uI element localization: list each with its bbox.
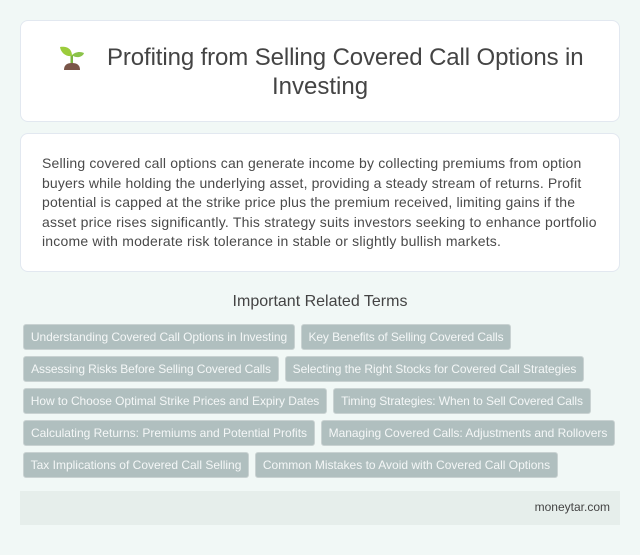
- chip: [23, 356, 279, 382]
- chip: [333, 388, 591, 414]
- chip: [255, 452, 558, 478]
- chip: [23, 324, 295, 350]
- chip: Key Benefits of Selling Covered Calls: [308, 330, 504, 344]
- chip: Common Mistakes to Avoid with Covered Call Options: [263, 458, 550, 472]
- chip: Selecting the Right Stocks for Covered Call Strategies: [293, 362, 576, 376]
- chip: [23, 452, 249, 478]
- panel: description card: [20, 133, 620, 272]
- chip: [321, 420, 615, 446]
- description text: buyers while holding the underlying asset, providing a steady stream of returns. Profit: [42, 174, 581, 190]
- title: Investing: [272, 73, 368, 100]
- description text: asset price rises significantly. This strategy suits investors seeking to enhance portfolio: [42, 214, 597, 230]
- description text: potential is capped at the strike price plus the premium received, limiting gains if the: [42, 194, 575, 210]
- chip: How to Choose Optimal Strike Prices and Expiry Dates: [31, 394, 319, 408]
- icon: seedling: [60, 46, 84, 70]
- chip: [23, 420, 315, 446]
- title: [107, 44, 584, 100]
- chip: Timing Strategies: When to Sell Covered Calls: [341, 394, 583, 408]
- heading: related terms: Important Related Terms: [233, 293, 407, 310]
- panel: title card: [20, 20, 620, 122]
- chip: Calculating Returns: Premiums and Potential Profits: [31, 426, 307, 440]
- chip: [23, 388, 327, 414]
- chip: Understanding Covered Call Options in Investing: [31, 330, 287, 344]
- chip: Tax Implications of Covered Call Selling: [31, 458, 241, 472]
- description text: income with moderate risk tolerance in stable or slightly bullish markets.: [42, 233, 501, 249]
- chip: Assessing Risks Before Selling Covered Calls: [31, 362, 271, 376]
- footer source: moneytar.com: [535, 500, 610, 514]
- title: Profiting from Selling Covered Call Options in: [107, 44, 584, 71]
- description text: Selling covered call options can generate income by collecting premiums from option: [42, 155, 581, 171]
- chip: Managing Covered Calls: Adjustments and Rollovers: [329, 426, 607, 440]
- description text: [42, 155, 597, 249]
- chip: [301, 324, 511, 350]
- footer bar: [20, 491, 620, 525]
- chip: [285, 356, 584, 382]
- chip list: related terms: [23, 324, 615, 478]
